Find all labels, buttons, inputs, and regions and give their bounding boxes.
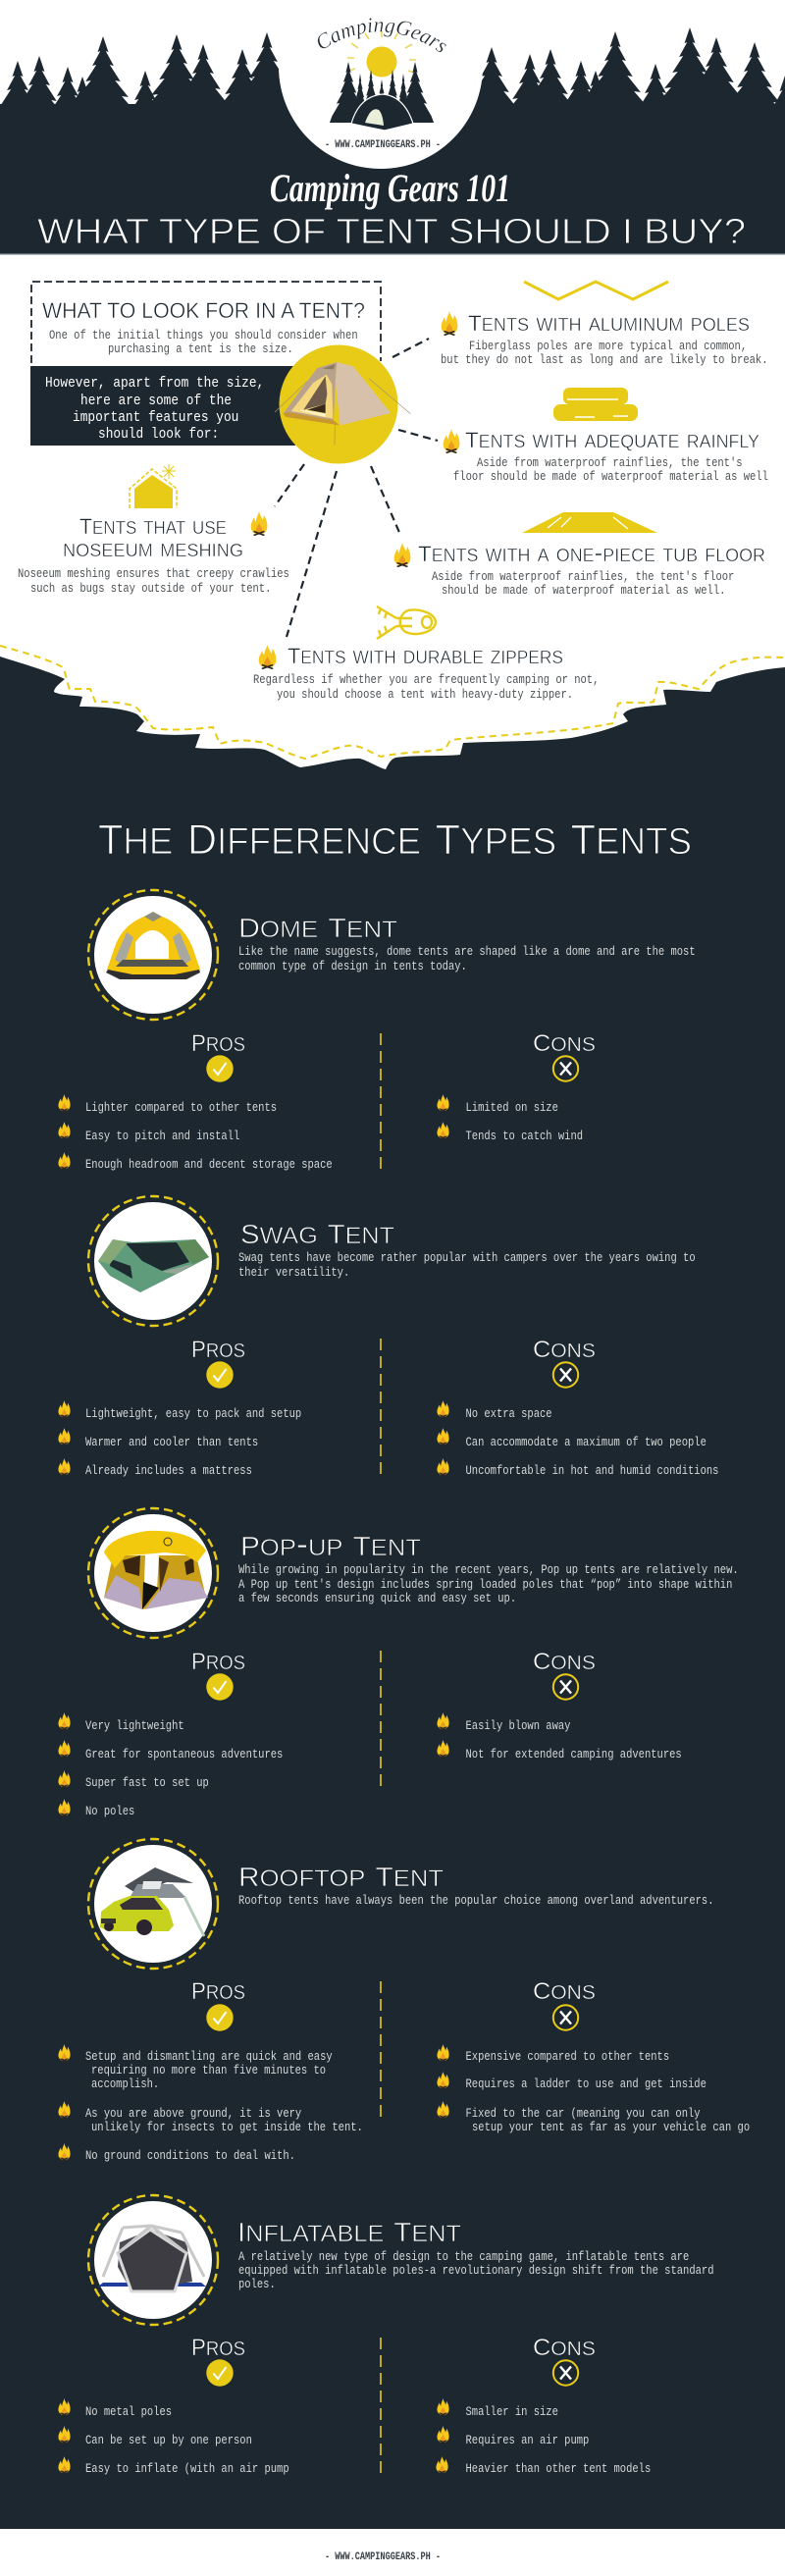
title: WHAT TYPE OF TENT SHOULD I BUY? bbox=[37, 211, 746, 251]
cons column: Cons bbox=[533, 2331, 596, 2361]
feature: aluminum poles bbox=[441, 282, 767, 367]
icon: flame bbox=[259, 645, 276, 669]
pros column: Pros bbox=[191, 1333, 245, 1363]
description bbox=[238, 1250, 696, 1280]
photo: pop-up tent bbox=[88, 1508, 218, 1638]
pros column: Lighter compared to other tents bbox=[85, 1100, 277, 1115]
pros column: No metal poles bbox=[85, 2404, 172, 2419]
pros column: Pros bbox=[191, 2331, 245, 2361]
dark callout bbox=[30, 366, 295, 446]
cons column: Expensive compared to other tents bbox=[465, 2049, 669, 2064]
dark callout: important features you bbox=[73, 410, 238, 426]
icon: zipper bbox=[377, 606, 436, 639]
dark callout: should look for: bbox=[98, 427, 219, 443]
tent name: Swag Tent bbox=[240, 1214, 394, 1251]
heading: Tents that use bbox=[79, 510, 227, 540]
body: you should choose a tent with heavy-duty zipper. bbox=[277, 687, 573, 702]
footer url: - WWW.CAMPINGGEARS.PH - bbox=[325, 2551, 441, 2563]
description: their versatility. bbox=[238, 1265, 349, 1280]
pros column: Already includes a mattress bbox=[85, 1463, 252, 1478]
logo bbox=[318, 18, 446, 151]
section: dome tent bbox=[58, 890, 696, 1173]
pros column: Pros bbox=[191, 1645, 245, 1675]
photo: swag tent bbox=[88, 1196, 218, 1326]
cons column: Smaller in size bbox=[465, 2404, 558, 2419]
photo: inflatable tent bbox=[88, 2195, 218, 2325]
section: pop-up tent bbox=[58, 1508, 739, 1818]
body bbox=[253, 672, 599, 702]
body bbox=[18, 566, 289, 596]
photo: rooftop tent bbox=[88, 1839, 218, 1969]
description bbox=[238, 2249, 713, 2291]
body: should be made of waterproof material as well. bbox=[442, 583, 725, 598]
description: a few seconds ensuring quick and easy set up. bbox=[238, 1591, 516, 1605]
cons column bbox=[436, 2331, 651, 2476]
logo script: CampingGears bbox=[318, 18, 446, 53]
pros column: accomplish. bbox=[91, 2077, 159, 2091]
pros column bbox=[58, 1974, 363, 2163]
body: Noseeum meshing ensures that creepy crawlies bbox=[18, 566, 289, 581]
photo: dome tent bbox=[88, 890, 218, 1020]
logo trees and tent bbox=[330, 62, 434, 132]
pros column: Setup and dismantling are quick and easy bbox=[85, 2049, 333, 2064]
pros column: Pros bbox=[191, 1026, 245, 1057]
body: Aside from waterproof rainflies, the tent's floor bbox=[432, 569, 734, 584]
description: A relatively new type of design to the camping game, inflatable tents are bbox=[238, 2249, 689, 2264]
description: Swag tents have become rather popular with campers over the years owing to bbox=[238, 1250, 696, 1265]
description: Rooftop tents have always been the popular choice among overland adventurers. bbox=[238, 1893, 713, 1908]
pros column: unlikely for insects to get inside the tent. bbox=[91, 2120, 363, 2134]
cons column bbox=[437, 1026, 596, 1143]
description: While growing in popularity in the recent years, Pop up tents are relatively new. bbox=[238, 1562, 739, 1577]
icon: rainfly bbox=[553, 388, 638, 421]
pros column: Easy to pitch and install bbox=[85, 1129, 239, 1143]
heading: Tents with durable zippers bbox=[288, 640, 563, 669]
pros column: No ground conditions to deal with. bbox=[85, 2148, 295, 2163]
tent name: Rooftop Tent bbox=[238, 1857, 444, 1894]
pros column: As you are above ground, it is very bbox=[85, 2106, 301, 2121]
cons column: Tends to catch wind bbox=[465, 1129, 583, 1143]
cons column: Fixed to the car (meaning you can only bbox=[465, 2106, 701, 2121]
cons column: Requires a ladder to use and get inside bbox=[465, 2077, 706, 2091]
icon: poles bbox=[524, 282, 668, 299]
heading: Tents with aluminum poles bbox=[468, 307, 750, 337]
cons column: Requires an air pump bbox=[465, 2433, 589, 2447]
section: swag tent bbox=[58, 1196, 718, 1479]
heading: Tents with adequate rainfly bbox=[465, 424, 759, 453]
icon: flame bbox=[251, 511, 267, 536]
panel heading: WHAT TO LOOK FOR IN A TENT? bbox=[42, 298, 365, 323]
cons column bbox=[437, 1333, 718, 1478]
pros column bbox=[58, 1333, 301, 1478]
pros column bbox=[58, 1645, 283, 1818]
cons column: Heavier than other tent models bbox=[465, 2461, 651, 2476]
pros column: Pros bbox=[191, 1974, 245, 2005]
dark panel with torn edge bbox=[0, 646, 785, 2529]
body: but they do not last as long and are likely to break. bbox=[441, 352, 767, 367]
feature: tub floor bbox=[394, 512, 765, 598]
body bbox=[432, 569, 734, 598]
section heading: The Difference Types Tents bbox=[98, 807, 692, 866]
heading: noseeum meshing bbox=[63, 533, 243, 562]
pros column bbox=[58, 2331, 289, 2476]
icon: central tent bbox=[275, 345, 410, 463]
cons column: Cons bbox=[533, 1333, 596, 1363]
cons column: Cons bbox=[533, 1645, 596, 1675]
description: A Pop up tent's design includes spring loaded poles that “pop” into shape within bbox=[238, 1577, 732, 1592]
dark callout: However, apart from the size, bbox=[45, 376, 264, 392]
icon: mesh tent bbox=[130, 464, 177, 508]
dark callout: here are some of the bbox=[80, 394, 232, 409]
body bbox=[453, 455, 768, 484]
tent name: Dome Tent bbox=[238, 908, 397, 945]
pros column: Very lightweight bbox=[85, 1718, 184, 1733]
cons column: Uncomfortable in hot and humid conditions bbox=[465, 1463, 718, 1478]
description: equipped with inflatable poles-a revolutionary design shift from the standard bbox=[238, 2263, 713, 2278]
pros column: Super fast to set up bbox=[85, 1775, 209, 1790]
description: Like the name suggests, dome tents are shaped like a dome and are the most bbox=[238, 944, 696, 959]
description bbox=[238, 944, 696, 973]
body: Aside from waterproof rainflies, the tent's bbox=[477, 455, 743, 470]
pros column: No poles bbox=[85, 1804, 134, 1818]
panel intro: One of the initial things you should consider when bbox=[49, 328, 358, 342]
pros column: Can be set up by one person bbox=[85, 2433, 252, 2447]
body: such as bugs stay outside of your tent. bbox=[30, 581, 271, 596]
cons column bbox=[437, 1645, 682, 1761]
connector arrows bbox=[275, 339, 438, 637]
pros column bbox=[58, 1026, 333, 1172]
icon: flame bbox=[442, 311, 457, 336]
description: common type of design in tents today. bbox=[238, 959, 467, 973]
cons column: Cons bbox=[533, 1974, 596, 2005]
panel: what to look for bbox=[30, 282, 381, 446]
pros column: Easy to inflate (with an air pump bbox=[85, 2461, 289, 2476]
description bbox=[238, 1562, 739, 1605]
section: rooftop tent bbox=[58, 1839, 750, 2163]
icon: floor bbox=[522, 512, 657, 533]
panel intro bbox=[49, 328, 358, 356]
pros column: Lightweight, easy to pack and setup bbox=[85, 1406, 301, 1421]
cons column: setup your tent as far as your vehicle can go bbox=[472, 2120, 750, 2134]
body: floor should be made of waterproof material as well bbox=[453, 469, 768, 484]
pros column: Warmer and cooler than tents bbox=[85, 1435, 258, 1449]
cons column: Can accommodate a maximum of two people bbox=[465, 1435, 706, 1449]
logo sun bbox=[347, 31, 416, 77]
cons column bbox=[437, 1974, 750, 2134]
heading: Tents with a one-piece tub floor bbox=[418, 538, 765, 567]
cons column: Easily blown away bbox=[465, 1718, 570, 1733]
pros column: Great for spontaneous adventures bbox=[85, 1747, 283, 1761]
cons column: No extra space bbox=[465, 1406, 552, 1421]
feature: durable zippers bbox=[253, 606, 599, 702]
feature: rainfly bbox=[444, 388, 768, 484]
subtitle: Camping Gears 101 bbox=[270, 166, 510, 210]
pros column: requiring no more than five minutes to bbox=[91, 2063, 326, 2077]
logo url: - WWW.CAMPINGGEARS.PH - bbox=[325, 139, 441, 151]
icon: flame bbox=[444, 429, 459, 453]
body: Regardless if whether you are frequently camping or not, bbox=[253, 672, 599, 687]
tent name: Inflatable Tent bbox=[237, 2212, 461, 2249]
icon: flame bbox=[394, 543, 410, 567]
feature: noseeum meshing bbox=[18, 464, 289, 596]
heading bbox=[63, 510, 243, 562]
description: poles. bbox=[238, 2277, 276, 2291]
cons column: Cons bbox=[533, 1026, 596, 1057]
header: forest banner bbox=[0, 0, 785, 255]
cons column: Limited on size bbox=[465, 1100, 558, 1115]
tent name: Pop-up Tent bbox=[240, 1526, 421, 1563]
panel intro: purchasing a tent is the size. bbox=[108, 342, 293, 356]
body: Fiberglass poles are more typical and common, bbox=[469, 339, 747, 353]
pros column: Enough headroom and decent storage space bbox=[85, 1157, 333, 1172]
section: inflatable tent bbox=[58, 2195, 713, 2478]
cons column: Not for extended camping adventures bbox=[465, 1747, 682, 1761]
body bbox=[441, 339, 767, 367]
